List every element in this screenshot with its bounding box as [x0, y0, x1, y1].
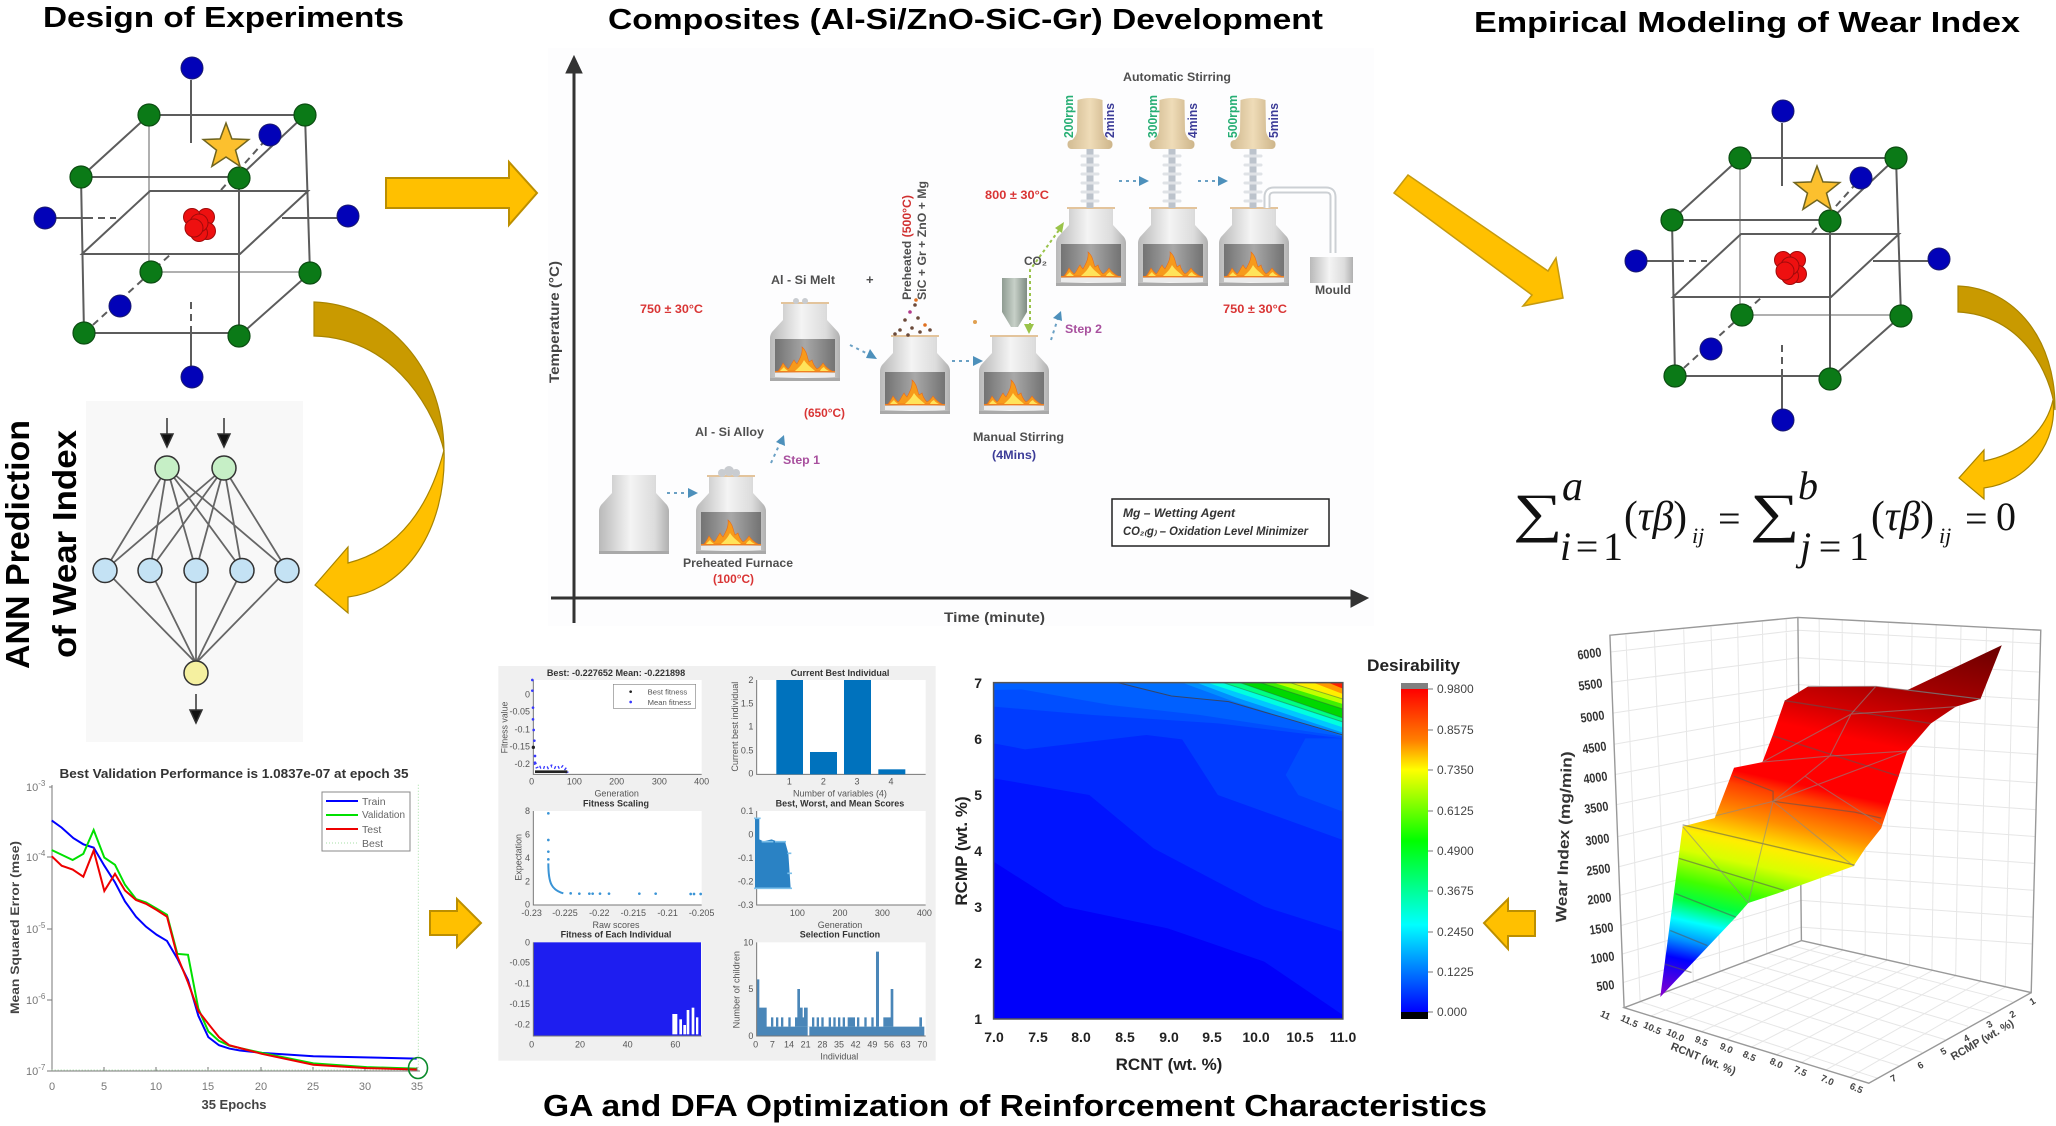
- arrow: composites to modeling: [1394, 175, 1563, 306]
- equation: =: [1718, 496, 1741, 541]
- equation: =: [1965, 496, 1988, 541]
- subplot: selection function: 42: [851, 1039, 861, 1049]
- x tick labels: 0: [49, 1081, 55, 1093]
- y tick labels: 5: [974, 787, 982, 803]
- furnaces: [599, 207, 1289, 554]
- x tick labels: [49, 1081, 423, 1093]
- arrow: ANN plot to GA: [430, 899, 481, 947]
- z axis tick labels: 1500: [1588, 919, 1614, 938]
- process labels: Preheated (500°C): [902, 195, 914, 300]
- colorbar labels: 0.7350: [1437, 763, 1474, 777]
- colorbar labels: 0.2450: [1437, 925, 1474, 939]
- panel: composite development process chart: [546, 48, 1374, 626]
- z axis tick labels: 3500: [1583, 798, 1609, 817]
- legend: Best: [362, 838, 383, 850]
- y tick labels: 10: [26, 852, 38, 864]
- stirring durations: (4Mins): [992, 450, 1036, 462]
- y tick labels: 10: [26, 1066, 38, 1078]
- z axis tick labels: 5000: [1579, 707, 1605, 726]
- equation: ∑: [1750, 483, 1800, 543]
- x tick labels: 20: [255, 1081, 267, 1093]
- stirring speeds: 300rpm: [1145, 95, 1160, 138]
- process labels: CO₂: [1024, 256, 1047, 268]
- input nodes: [155, 456, 236, 480]
- y tick labels: 2: [974, 955, 982, 971]
- legend: [322, 792, 410, 851]
- subplot: fitness scaling: -0.21: [657, 908, 678, 918]
- y axis tick labels: 7: [1889, 1073, 1899, 1085]
- subplot: current best individual: 0: [748, 769, 753, 779]
- subplot: best and mean fitness: Best fitness: [648, 688, 687, 697]
- legend box: CO₂₍g₎ – Oxidation Level Minimizer: [1123, 526, 1309, 538]
- stirring durations: [992, 103, 1281, 462]
- equation: ∑: [1513, 483, 1563, 543]
- panel: GA optimization plots: [498, 666, 936, 1061]
- y tick labels: 3: [974, 899, 982, 915]
- subplot: current best individual: 1: [748, 722, 753, 732]
- subplot: fitness scaling: Raw scores: [593, 920, 640, 930]
- title: ANN Prediction of Wear Index: [0, 420, 83, 669]
- equation: i = 1: [1560, 524, 1623, 569]
- subplot: fitness scaling: 8: [525, 806, 530, 816]
- process labels: Al - Si Alloy: [695, 427, 765, 439]
- y axis label: RCMP (wt. %): [1949, 1017, 2016, 1063]
- x tick labels: 10.5: [1286, 1029, 1314, 1045]
- subplot: fitness of each individual: [510, 930, 702, 1049]
- process labels: Preheated Furnace: [683, 558, 793, 570]
- subplot: fitness of each individual: 0: [525, 937, 530, 947]
- subplot: selection function: Number of children: [732, 951, 742, 1028]
- hidden nodes: [93, 558, 299, 582]
- subplot: best and mean fitness: [499, 668, 709, 799]
- arrow: surface plot to DFA: [1484, 899, 1535, 949]
- legend: Train: [362, 796, 386, 808]
- equation: j = 1: [1795, 524, 1869, 569]
- step labels: [783, 324, 1102, 467]
- x tick labels: 35: [411, 1081, 423, 1093]
- y axis tick labels: 2: [2008, 1009, 2018, 1021]
- process labels: Manual Stirring: [973, 432, 1064, 444]
- performance curves: [52, 785, 418, 1071]
- subplot: best and mean fitness: Best: -0.227652 Mean: -0.221898: [547, 668, 685, 678]
- subplot: best, worst and mean scores: -0.3: [738, 900, 753, 910]
- x axis tick labels: 11: [1598, 1009, 1613, 1023]
- y axis tick labels: [1889, 995, 2038, 1085]
- colorbar scale: [1401, 683, 1433, 1019]
- subplot: fitness scaling: -0.205: [689, 908, 714, 918]
- chart: ANN validation performance: [8, 766, 428, 1112]
- 3D frame edges: [1610, 617, 2041, 1083]
- equation: ij: [1692, 523, 1704, 548]
- central composite design cube: modeling: [1625, 100, 1950, 431]
- title: ANN Prediction of Wear Index: ANN Prediction: [0, 420, 36, 669]
- subplot: best and mean fitness: -0.05: [510, 707, 530, 717]
- x axis tick labels: 7.5: [1792, 1064, 1809, 1080]
- step labels: Step 1: [783, 455, 821, 467]
- colorbar: desirability: [1367, 656, 1474, 1019]
- z axis tick labels: 500: [1595, 977, 1615, 994]
- 3D frame grid: [1611, 618, 2040, 1078]
- stirring speeds: [1061, 95, 1240, 138]
- subplot: best, worst and mean scores: Best, Worst, and Mean Scores: [776, 799, 904, 809]
- z axis tick labels: 5500: [1577, 675, 1603, 694]
- subplot: best, worst and mean scores: 0: [748, 829, 753, 839]
- x tick labels: 15: [202, 1081, 214, 1093]
- subplot: selection function: 28: [817, 1039, 827, 1049]
- colorbar title: Desirability: [1367, 656, 1461, 675]
- title: GA and DFA Optimization: GA and DFA Optimization of Reinforcement Characteristics: [543, 1088, 1487, 1123]
- colorbar labels: 0.6125: [1437, 804, 1474, 818]
- y tick labels: -7: [38, 1063, 46, 1072]
- x tick labels: 9.5: [1202, 1029, 1222, 1045]
- subplot: fitness of each individual: 0: [529, 1039, 534, 1049]
- x axis tick labels: 8.5: [1741, 1049, 1758, 1065]
- y axis tick labels: 1: [2028, 995, 2038, 1008]
- z axis tick labels: 2500: [1585, 860, 1611, 879]
- z axis label: Wear Index (mg/min): [1553, 751, 1576, 923]
- axes: [551, 56, 1368, 623]
- x axis tick labels: [1598, 1009, 1865, 1097]
- subplot: fitness scaling: 6: [525, 829, 530, 839]
- axis label: time: Time (minute): [944, 609, 1045, 625]
- subplot: best, worst and mean scores: -0.2: [738, 877, 753, 887]
- y axis tick labels: 5: [1939, 1045, 1949, 1058]
- subplot: current best individual: 0.5: [741, 745, 753, 755]
- subplot: current best individual: 3: [854, 777, 859, 787]
- subplot: fitness scaling: -0.23: [521, 908, 542, 918]
- subplot: best and mean fitness: 400: [694, 777, 709, 787]
- process labels: SiC + Gr + ZnO + Mg: [917, 181, 929, 300]
- central composite design cube: [34, 57, 359, 388]
- colorbar labels: 0.9800: [1437, 682, 1474, 696]
- subplot: selection function: 70: [917, 1039, 927, 1049]
- step arrow heads: [688, 176, 1228, 498]
- subplot: current best individual: 2: [821, 777, 826, 787]
- legend: Validation: [362, 809, 405, 821]
- y tick labels: 6: [974, 731, 982, 747]
- x tick labels: 30: [359, 1081, 371, 1093]
- y axis tick labels: 6: [1916, 1060, 1926, 1072]
- x tick labels: 8.5: [1115, 1029, 1135, 1045]
- y tick labels: -3: [38, 779, 46, 788]
- stirrers: [1068, 98, 1276, 208]
- equation: ij: [1939, 523, 1951, 548]
- temperature labels: 750 ± 30°C: [1223, 304, 1287, 316]
- temperature labels: 800 ± 30°C: [985, 190, 1049, 202]
- equation: a: [1562, 464, 1583, 510]
- subplot: fitness scaling: 0: [525, 899, 530, 909]
- stirring speeds: 500rpm: [1225, 95, 1240, 138]
- output node: [184, 661, 208, 685]
- subplot: best and mean fitness: Generation: [594, 789, 639, 799]
- subplot: best and mean fitness: 0: [529, 777, 534, 787]
- x axis label: RCNT (wt. %): [1669, 1041, 1738, 1078]
- subplot: fitness scaling: [513, 799, 714, 930]
- stirring speeds: 200rpm: [1061, 95, 1076, 138]
- x axis tick labels: 9.5: [1693, 1034, 1710, 1050]
- subplot: current best individual: Current Best Individual: [791, 668, 889, 678]
- x tick labels: 11.0: [1330, 1029, 1356, 1045]
- x tick labels: [984, 1029, 1356, 1045]
- subplot: best, worst and mean scores: -0.1: [738, 853, 753, 863]
- subplot: best, worst and mean scores: 100: [790, 908, 805, 918]
- subplot: fitness scaling: 4: [525, 853, 530, 863]
- subplot: best and mean fitness: 200: [609, 777, 624, 787]
- subplot: best, worst and mean scores: 0.1: [741, 806, 753, 816]
- y tick labels: 4: [974, 843, 982, 859]
- process labels: Automatic Stirring: [1123, 72, 1231, 84]
- subplot: selection function: Individual: [820, 1051, 858, 1061]
- temperature labels: 750 ± 30°C: [640, 304, 703, 316]
- arrow: DoE to composites: [386, 162, 537, 225]
- subplot: best and mean fitness: 300: [652, 777, 667, 787]
- axis label: temperature: Temperature (°C): [546, 261, 562, 383]
- subplot: selection function: 0: [748, 1031, 753, 1041]
- subplot: selection function: 49: [867, 1039, 877, 1049]
- stirring durations: 2mins: [1103, 103, 1117, 138]
- subplot: selection function: [732, 930, 927, 1061]
- chart: desirability contour: [952, 675, 1356, 1074]
- subplot: current best individual: 1: [787, 777, 792, 787]
- legend box: Mg – Wetting Agent: [1123, 508, 1236, 520]
- subplot: fitness of each individual: 20: [575, 1039, 585, 1049]
- equation: (τβ): [1871, 494, 1934, 540]
- subplot: best and mean fitness: 0: [525, 689, 530, 699]
- subplot: fitness of each individual: -0.1: [515, 978, 530, 988]
- temperature labels: (650°C): [804, 408, 845, 420]
- x axis tick labels: 11.5: [1619, 1013, 1640, 1031]
- subplot: selection function: Selection Function: [800, 930, 880, 940]
- subplot: fitness scaling: -0.22: [589, 908, 610, 918]
- x tick labels: 10.0: [1242, 1029, 1270, 1045]
- colorbar labels: 0.000: [1437, 1005, 1467, 1019]
- x axis label: RCNT (wt. %): [1116, 1055, 1222, 1074]
- z axis tick labels: 1000: [1589, 948, 1615, 967]
- legend box: [1112, 499, 1329, 546]
- subplot: selection function: 14: [784, 1039, 794, 1049]
- title: Design of Experiments: Design of Experiments: [43, 2, 404, 34]
- alloy pieces: [718, 298, 808, 477]
- subplot: fitness scaling: -0.225: [552, 908, 578, 918]
- best point marker: [408, 1058, 428, 1078]
- y axis tick labels: 4: [1962, 1032, 1972, 1045]
- y tick labels: 1: [974, 1011, 982, 1027]
- axes: [47, 785, 420, 1071]
- subplot: fitness scaling: 2: [525, 876, 530, 886]
- subplot: best and mean fitness: -0.1: [515, 724, 530, 734]
- reinforcement particles: [893, 298, 977, 337]
- x tick labels: 5: [101, 1081, 107, 1093]
- equation: [1513, 463, 2016, 569]
- x tick labels: 10: [150, 1081, 162, 1093]
- x axis label: 35 Epochs: [201, 1097, 267, 1112]
- process labels: +: [866, 272, 874, 287]
- y tick labels: -4: [38, 849, 46, 858]
- colorbar labels: [1437, 682, 1474, 1019]
- subplot: current best individual: 2: [748, 675, 753, 685]
- surface mesh: strong lines: [1665, 690, 1980, 972]
- title: Composites Development: Composites (Al-Si/ZnO-SiC-Gr) Development: [608, 4, 1323, 36]
- y axis label: RCMP (wt. %): [952, 796, 971, 906]
- subplot: best and mean fitness: Fitness value: [499, 702, 509, 753]
- y tick labels: [26, 779, 46, 1078]
- chart title: Best Validation Performance is 1.0837e-07 at epoch 35: [60, 766, 408, 781]
- process labels: Mould: [1315, 285, 1351, 297]
- z axis tick labels: [1576, 644, 1615, 994]
- subplot: best and mean fitness: Mean fitness: [648, 698, 691, 707]
- y tick labels: 10: [26, 995, 38, 1007]
- stirring durations: 5mins: [1267, 103, 1281, 138]
- x tick labels: 9.0: [1159, 1029, 1179, 1045]
- subplot: best, worst and mean scores: 400: [917, 908, 932, 918]
- subplot: selection function: 56: [884, 1039, 894, 1049]
- mould: [1310, 257, 1353, 283]
- z axis tick labels: 6000: [1576, 644, 1602, 663]
- subplot: fitness scaling: -0.215: [621, 908, 646, 918]
- equation: 0: [1996, 494, 2016, 539]
- y tick labels: -6: [38, 992, 46, 1001]
- z axis tick labels: 4500: [1581, 738, 1607, 757]
- subplot: selection function: 21: [801, 1039, 811, 1049]
- colored surface: [1660, 645, 2002, 997]
- subplot: selection function: 63: [901, 1039, 911, 1049]
- subplot: current best individual: 1.5: [741, 698, 753, 708]
- y axis tick labels: 3: [1985, 1019, 1995, 1031]
- CO2 nozzle: [1002, 278, 1027, 327]
- y axis label: Mean Squared Error (mse): [8, 841, 22, 1014]
- z axis tick labels: 2000: [1586, 889, 1612, 908]
- CO2 flow arrow: [1024, 222, 1064, 334]
- pouring pipe: [1267, 190, 1333, 253]
- legend: Test: [362, 824, 381, 836]
- subplot: fitness of each individual: Fitness of Each Individual: [561, 930, 671, 940]
- curved arrow: DoE to ANN: [314, 302, 444, 613]
- y tick labels: [974, 675, 982, 1027]
- subplot: fitness scaling: Fitness Scaling: [583, 799, 649, 809]
- subplot: fitness scaling: Expectation: [513, 834, 523, 881]
- subplot: best and mean fitness: 100: [567, 777, 582, 787]
- subplot: fitness of each individual: -0.05: [510, 958, 530, 968]
- subplot: selection function: 5: [748, 984, 753, 994]
- step labels: Step 2: [1065, 324, 1102, 336]
- subplot: selection function: 0: [753, 1039, 758, 1049]
- subplot: best, worst and mean scores: Generation: [818, 920, 862, 930]
- subplot: current best individual: [730, 668, 926, 799]
- title: ANN Prediction of Wear Index: of Wear Index: [46, 429, 83, 658]
- subplot: fitness of each individual: 60: [670, 1039, 680, 1049]
- subplot: fitness of each individual: 40: [623, 1039, 633, 1049]
- x tick labels: 7.5: [1028, 1029, 1048, 1045]
- equation: b: [1798, 463, 1818, 508]
- x tick labels: 7.0: [984, 1029, 1004, 1045]
- subplot: selection function: 7: [770, 1039, 775, 1049]
- step arrows: [667, 181, 1221, 493]
- x axis tick labels: 7.0: [1819, 1073, 1835, 1089]
- x axis tick labels: 9.0: [1718, 1041, 1734, 1057]
- process labels: [683, 72, 1351, 570]
- colorbar labels: 0.3675: [1437, 884, 1474, 898]
- surface mesh: light lines: [1683, 686, 1980, 903]
- x axis tick labels: 8.0: [1768, 1056, 1784, 1072]
- subplot: current best individual: Number of variables (4): [793, 789, 887, 799]
- title: Empirical Modeling of Wear Index: Empirical Modeling of Wear Index: [1474, 7, 2020, 39]
- contour bands: [994, 683, 1343, 1019]
- temperature labels: (100°C): [713, 574, 754, 586]
- subplot: selection function: 35: [834, 1039, 844, 1049]
- subplot: current best individual: Current best individual: [730, 682, 740, 772]
- subplot: best and mean fitness: -0.2: [515, 759, 530, 769]
- z axis tick labels: 3000: [1584, 830, 1610, 849]
- colorbar labels: 0.4900: [1437, 844, 1474, 858]
- subplot: best, worst and mean scores: 200: [832, 908, 847, 918]
- x tick labels: 8.0: [1071, 1029, 1091, 1045]
- curved arrow: cube to equation: [1958, 286, 2055, 499]
- subplot: best and mean fitness: -0.15: [510, 742, 530, 752]
- y tick labels: 7: [974, 675, 982, 691]
- colorbar labels: 0.1225: [1437, 965, 1474, 979]
- process labels: Al - Si Melt: [771, 275, 835, 287]
- subplot: fitness of each individual: -0.15: [510, 999, 530, 1009]
- panel: ANN diagram: [86, 401, 303, 742]
- subplot: best, worst and mean scores: [738, 799, 932, 930]
- temperature labels: [640, 190, 1287, 586]
- x axis tick labels: 10.0: [1664, 1027, 1686, 1045]
- connections: [105, 468, 287, 663]
- y tick labels: 10: [26, 924, 38, 936]
- subplot: best, worst and mean scores: 300: [875, 908, 890, 918]
- stirring durations: 4mins: [1186, 103, 1200, 138]
- z axis tick labels: 4000: [1582, 768, 1608, 787]
- y tick labels: 10: [26, 782, 38, 794]
- x axis tick labels: 10.5: [1641, 1020, 1663, 1038]
- subplot: selection function: 10: [743, 937, 753, 947]
- input and output arrows: [161, 418, 230, 723]
- equation: (τβ): [1624, 494, 1687, 540]
- colorbar labels: 0.8575: [1437, 723, 1474, 737]
- subplot: fitness of each individual: -0.2: [515, 1020, 530, 1030]
- y tick labels: -5: [38, 921, 46, 930]
- chart: 3D wear index surface: [1553, 617, 2041, 1097]
- x axis tick labels: 6.5: [1848, 1081, 1865, 1097]
- x tick labels: 25: [307, 1081, 319, 1093]
- subplot: current best individual: 4: [888, 777, 893, 787]
